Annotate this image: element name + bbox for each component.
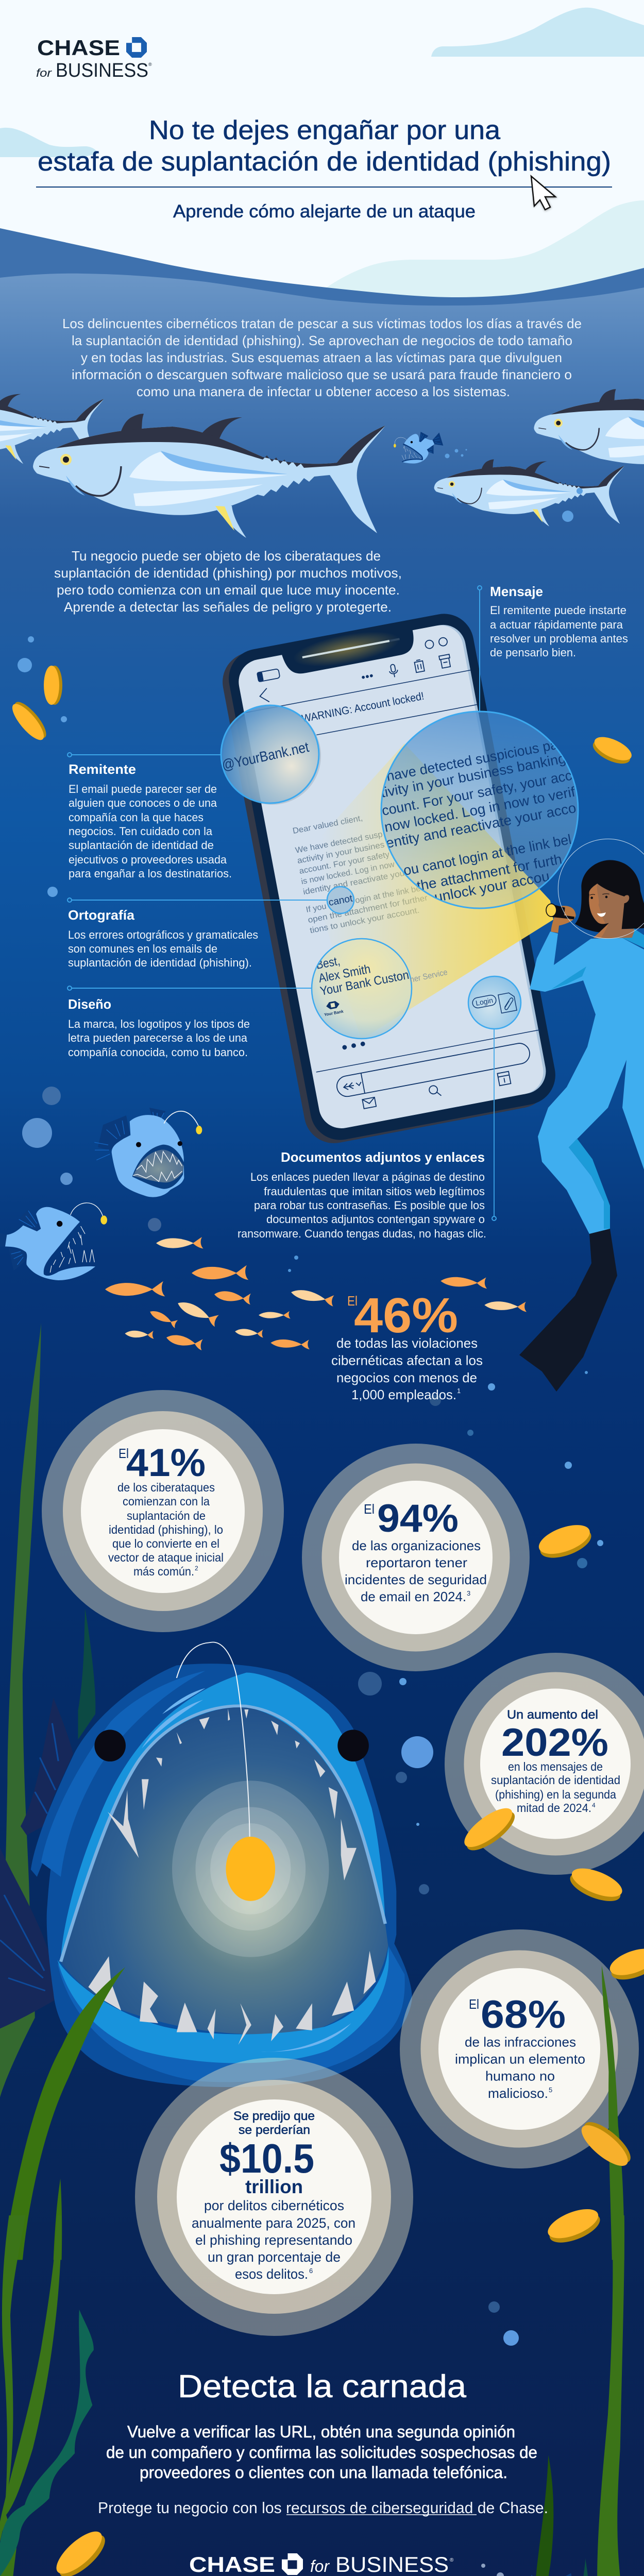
stat circle: 41%: El <box>118 1446 129 1461</box>
icon: Chase octagon white <box>282 2553 303 2575</box>
stat circle: 202%: suplantación de identidad <box>491 1773 620 1787</box>
callout: Documentos adjuntos y enlaces <box>238 1149 486 1240</box>
magnifier: signature and logo: Your Bank <box>324 1009 344 1017</box>
callout: Ortografía: Los errores ortográficos y gramaticales <box>68 928 258 941</box>
bubbles near bottom fish <box>481 2564 519 2576</box>
stat circle: $10.5 trillion: 6 <box>309 2267 313 2275</box>
callout: Documentos adjuntos y enlaces: ransomware. Cuando tengas dudas, no hagas clic. <box>238 1227 486 1240</box>
magnifier: attachment and link: Login <box>475 996 494 1007</box>
callout: Diseño: compañía conocida, como tu banco. <box>68 1046 248 1059</box>
stat circle: $10.5 trillion: el phishing representando <box>195 2232 352 2248</box>
callout: Mensaje: a actuar rápidamente para <box>490 618 623 631</box>
title: No te dejes engañar por una <box>149 115 500 145</box>
footer Chase for Business logo: CHASE <box>189 2552 275 2576</box>
coin <box>535 1519 595 1564</box>
stat circle: 41%: 41% <box>126 1441 206 1485</box>
lure <box>177 1642 250 1837</box>
stat circle: 94%: de email en 2024. <box>361 1589 466 1604</box>
magnifier: suspicious message: entity and reactivate your acco <box>385 800 578 851</box>
intro paragraph: información o descarguen software malicioso que se usará para fraude financiero o <box>72 367 572 382</box>
callout: Diseño: La marca, los logotipos y los tipos de <box>68 1018 250 1030</box>
callout: Documentos adjuntos y enlaces: Los enlaces pueden llevar a páginas de destino <box>250 1171 485 1183</box>
stat circle: $10.5 trillion: trillion <box>245 2176 303 2197</box>
title <box>38 115 611 177</box>
coin <box>50 2525 111 2576</box>
magnifier: suspicious message: count. For your safety, your acc <box>381 768 573 819</box>
second paragraph: suplantación de identidad (phishing) por muchos motivos, <box>54 565 402 581</box>
email body: tions to unlock your account. <box>309 906 420 935</box>
phone reply bar <box>312 1009 549 1118</box>
upper bubbles and coins <box>18 636 67 1105</box>
stat circle: $10.5 trillion <box>135 2058 413 2336</box>
flashlight beam <box>304 743 553 1040</box>
email body <box>291 805 431 935</box>
email body: open the attachment for further <box>307 893 429 925</box>
phone notch <box>280 622 417 676</box>
coin <box>544 2203 604 2248</box>
tuna: upper right <box>534 389 644 481</box>
stat circle: 41%: identidad (phishing), lo <box>109 1523 223 1536</box>
Chase for Business logo: CHASE <box>37 36 120 60</box>
Chase for Business logo: BUSINESS <box>56 60 148 81</box>
background seagrass <box>0 1323 95 2097</box>
diver suit and legs <box>530 931 644 1234</box>
stat circle: 68%: malicioso. <box>488 2086 548 2101</box>
diver hand <box>551 906 576 933</box>
callout: Remitente: alguien que conoces o de una <box>69 796 217 809</box>
signature remainder: ner Service <box>409 968 448 985</box>
anglerfish: large lurking face <box>31 1642 412 2087</box>
coin <box>8 698 51 744</box>
callout: Mensaje: resolver un problema antes <box>490 632 628 645</box>
magnifier: signature and logo: Your Bank Custon <box>319 968 410 998</box>
foreground seagrass: upper <box>5 1965 624 2260</box>
callout line: attachments <box>492 1029 496 1221</box>
stat circle: $10.5 trillion: se perderían <box>239 2123 310 2137</box>
mid bubbles <box>22 1118 603 2346</box>
second paragraph: Tu negocio puede ser objeto de los ciberataques de <box>72 548 381 564</box>
callout: Mensaje: Mensaje <box>490 584 543 599</box>
closing call to action: proveedores o clientes con una llamada telefónica. <box>140 2463 507 2482</box>
fish eyes <box>94 1730 126 1761</box>
stat: 46%: 1 <box>457 1387 461 1395</box>
diver fin <box>519 1229 617 1392</box>
email body: We have detected susp <box>295 830 383 855</box>
callout: Remitente <box>67 753 232 880</box>
callout: Remitente: Remitente <box>69 761 136 777</box>
stat circle: 94%: de las organizaciones <box>352 1538 481 1553</box>
stat circle: $10.5 trillion: $10.5 <box>219 2136 314 2181</box>
callout: Ortografía <box>67 898 328 969</box>
callout: Ortografía: suplantación de identidad (phishing). <box>68 956 252 969</box>
stat circle: 94%: reportaron tener <box>366 1555 467 1570</box>
stat circle: 41%: que lo convierte en el <box>112 1537 219 1550</box>
fish teeth <box>88 1709 376 2045</box>
tuna school <box>0 389 644 538</box>
helmet <box>558 839 644 939</box>
flashlight <box>550 904 574 919</box>
second paragraph <box>54 548 402 615</box>
ocean surface wave <box>0 228 644 361</box>
heading: Detecta la carnada: Detecta la carnada <box>178 2369 467 2404</box>
stat circle: 41%: 2 <box>195 1565 198 1572</box>
callout: Documentos adjuntos y enlaces: Documentos adjuntos y enlaces <box>281 1149 485 1165</box>
stat: 46%: El <box>347 1293 358 1309</box>
closing call to action: Vuelve a verificar las URL, obtén una segunda opinión <box>127 2422 515 2441</box>
stat circle: 94% <box>302 1444 530 1671</box>
diver head <box>546 839 644 939</box>
magnifier: signature and logo <box>312 939 412 1039</box>
callout: Remitente: ejecutivos o proveedores usada <box>69 853 227 866</box>
callout: Remitente: El email puede parecer ser de <box>69 783 217 795</box>
stat circle: 41%: vector de ataque inicial <box>108 1551 224 1564</box>
foreground seagrass: lower <box>0 2215 629 2576</box>
magnifier: suspicious message: now locked. Log in now to verif <box>383 784 577 835</box>
stat circle: 41%: comienzan con la <box>123 1495 210 1508</box>
coin <box>44 666 62 705</box>
closing call to action: de un compañero y confirma las solicitudes sospechosas de <box>106 2443 537 2462</box>
coin <box>575 2115 636 2173</box>
icon: mouse cursor <box>531 176 557 211</box>
stat circle: 94%: incidentes de seguridad <box>345 1572 487 1587</box>
intro paragraph: como una manera de infectar u obtener acceso a los sistemas. <box>137 384 510 399</box>
stat circle: 94%: El <box>364 1501 375 1517</box>
footer Chase for Business logo: BUSINESS <box>335 2552 449 2576</box>
bubbles near tuna <box>445 449 583 522</box>
tuna: small right <box>434 460 624 527</box>
magnifier: signature and logo: Best, <box>315 954 341 972</box>
stat: 46%: 46% <box>354 1288 458 1343</box>
title: estafa de suplantación de identidad (phishing) <box>38 147 611 177</box>
fish mouth interior <box>61 1707 388 2034</box>
callout: Remitente: negocios. Ten cuidado con la <box>69 825 212 838</box>
resources line: Protege tu negocio con los recursos de ciberseguridad de Chase. <box>98 2499 548 2517</box>
stat circle: $10.5 trillion: por delitos cibernéticos <box>204 2198 344 2213</box>
stat circle: 94%: 3 <box>467 1589 470 1597</box>
email body: activity in your busines <box>297 840 385 866</box>
callout: Remitente: para engañar a los destinatarios. <box>69 867 232 880</box>
icon: Chase octagon <box>126 37 147 58</box>
footer Chase for Business logo <box>189 2552 454 2576</box>
magnifier: suspicious message <box>380 711 578 908</box>
stat circle: 68%: humano no <box>485 2068 555 2083</box>
stat circle: 41%: suplantación de <box>127 1509 206 1522</box>
email body: is now locked. Log in now <box>300 860 396 886</box>
Chase for Business logo: ® <box>148 62 152 67</box>
anglerfish: bottom right <box>523 2573 629 2576</box>
callout: Documentos adjuntos y enlaces: para robar tus contraseñas. Es posible que los <box>254 1199 485 1212</box>
stat circle: 202%: Un aumento del <box>507 1708 598 1722</box>
callout: Remitente: compañía con la que haces <box>69 811 204 824</box>
coin <box>566 1862 626 1907</box>
email body: Dear valued client, <box>292 814 363 836</box>
callout: Ortografía: son comunes en los emails de <box>68 942 217 955</box>
magnifier: suspicious message: ou canot login at the link bel <box>402 832 572 878</box>
stat: 46% <box>331 1288 483 1402</box>
intro paragraph: Los delincuentes cibernéticos tratan de pescar a sus víctimas todos los días a través de <box>62 316 582 331</box>
callout: Diseño: letra pueden parecerse a los de una <box>68 1031 247 1044</box>
stat circle: $10.5 trillion: un gran porcentaje de <box>208 2249 341 2265</box>
email body: account. For your safety <box>298 850 390 876</box>
stat circle: $10.5 trillion: esos delitos. <box>235 2266 308 2282</box>
email body: identity and reactivate you <box>302 869 405 896</box>
stat: 46%: 1,000 empleados. <box>351 1387 456 1402</box>
stat circle: 68%: implican un elemento <box>455 2052 585 2067</box>
Chase for Business logo <box>36 36 152 81</box>
anglerfish: front facing <box>94 1108 202 1197</box>
footer Chase for Business logo: for <box>310 2557 330 2575</box>
phone mockup <box>217 609 561 1148</box>
tuna: left <box>0 392 104 464</box>
magnifier: attachment and link <box>468 976 521 1029</box>
tuna: large centre <box>33 414 385 538</box>
stat circle: 202%: 202% <box>501 1721 608 1765</box>
lure glow rings <box>172 1781 329 1957</box>
stat circle: 41%: de los ciberataques <box>117 1481 215 1494</box>
magnifier: suspicious message: the attachment for furth <box>416 851 563 894</box>
magnifier: signature and logo: Alex Smith <box>317 962 371 986</box>
stat circle: 202%: 4 <box>592 1802 596 1809</box>
stat circle: 202%: mitad de 2024. <box>517 1801 591 1815</box>
callout: Mensaje: de pensarlo bien. <box>490 646 576 659</box>
callout: Documentos adjuntos y enlaces: documentos adjuntos contengan spyware o <box>266 1213 485 1226</box>
email body: ogin at the link be <box>354 884 421 905</box>
intro paragraph <box>62 316 582 399</box>
email body: If you <box>306 902 327 914</box>
stat: 46%: negocios con menos de <box>336 1370 477 1385</box>
callout: Mensaje: El remitente puede instarte <box>490 604 626 617</box>
intro paragraph: y en todas las industrias. Sus esquemas atraen a las víctimas para que divulguen <box>81 350 562 365</box>
magnifier: suspicious message: have detected suspicious pa <box>385 736 560 784</box>
callout: Ortografía: Ortografía <box>68 907 135 923</box>
stat: 46%: de todas las violaciones <box>336 1335 478 1351</box>
magnifier: sender address: @YourBank.net <box>221 739 311 773</box>
phone status icons <box>256 637 452 703</box>
stat circle: 202% <box>445 1653 644 1875</box>
stat circle: 68%: El <box>469 1996 479 2012</box>
stat circle: 202%: en los mensajes de <box>508 1760 603 1773</box>
callout: Diseño <box>67 986 312 1059</box>
callout: Documentos adjuntos y enlaces: fraudulentas que imitan sitios web legítimos <box>264 1185 485 1198</box>
stat circle: 68%: 68% <box>481 1993 566 2037</box>
intro paragraph: la suplantación de identidad (phishing). Se aprovechan de negocios de todo tamaño <box>72 333 572 348</box>
magnifier: misspelled word <box>327 887 354 913</box>
callout: Mensaje <box>478 584 628 713</box>
coin <box>606 1943 644 1985</box>
stat circle: 68% <box>400 1929 639 2168</box>
subtitle: Aprende cómo alejarte de un ataque <box>173 201 476 222</box>
footer Chase for Business logo: ® <box>450 2557 454 2563</box>
diver with flashlight <box>519 839 644 1392</box>
stat circle: $10.5 trillion: anualmente para 2025, con <box>192 2215 355 2231</box>
sky clouds <box>0 8 644 309</box>
magnifier: misspelled word: canot <box>328 893 354 908</box>
stat circle: 68%: de las infracciones <box>465 2034 576 2049</box>
email subject: WARNING: Account locked! <box>301 690 425 725</box>
coin <box>589 732 635 768</box>
callout: Remitente: suplantación de identidad de <box>69 839 214 852</box>
callout: Diseño: Diseño <box>68 996 111 1012</box>
school of orange fish <box>105 1237 527 1350</box>
stat circle: $10.5 trillion: Se predijo que <box>233 2109 315 2123</box>
second paragraph: pero todo comienza con un email que luce muy inocente. <box>57 582 400 598</box>
small anglerfish <box>394 432 443 464</box>
magnifier: sender address <box>221 705 321 805</box>
stat: 46%: cibernéticas afectan a los <box>331 1353 483 1368</box>
stat circle: 41% <box>42 1390 284 1632</box>
magnifier: suspicious message: unlock your accou <box>433 868 551 905</box>
stat circle: 202%: (phishing) en la segunda <box>495 1788 617 1801</box>
stat circle: 41%: más común. <box>133 1565 194 1578</box>
second paragraph: Aprende a detectar las señales de peligro y protegerte. <box>64 599 392 615</box>
closing call to action <box>106 2422 537 2482</box>
magnifier: suspicious message: tivity in your business banking <box>380 751 567 801</box>
stat circle: 68%: 5 <box>549 2086 552 2094</box>
Chase for Business logo: for <box>36 66 53 79</box>
stat circle: 94%: 94% <box>377 1497 459 1540</box>
coin <box>459 1802 520 1857</box>
anglerfish: side view <box>0 1203 107 1280</box>
